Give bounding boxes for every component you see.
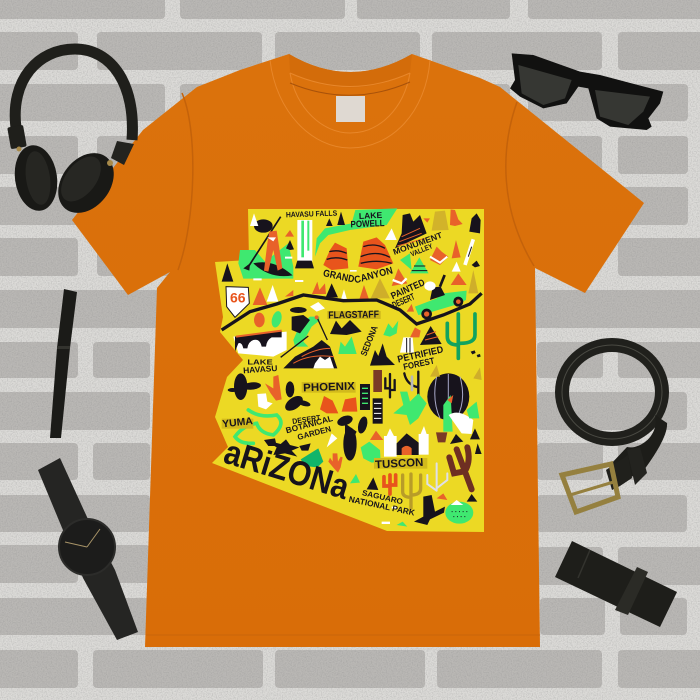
icon: sedona rocks [370, 343, 395, 366]
labels north: POWELL [350, 218, 385, 229]
icon: green shrubs [338, 321, 398, 354]
icon: leather belt [562, 345, 667, 512]
icon: white stripes [257, 393, 273, 409]
panel: southern arizona illustrations [220, 358, 482, 527]
labels south [220, 358, 427, 518]
icon: leather case [555, 541, 677, 627]
labels south: GARDEN [297, 424, 332, 442]
icon: pine trees [222, 212, 390, 305]
icon: flagstaff rocks [330, 320, 362, 335]
icon: route 66 sign: 66 [230, 290, 246, 306]
t-shirt [72, 54, 644, 647]
lake and river [238, 208, 397, 279]
labels north: MONUMENT [392, 230, 444, 257]
map outline [212, 209, 484, 532]
small rocks [367, 428, 482, 502]
icon: big dark prickly pear [336, 414, 369, 461]
icon: red and olive saguaros [384, 447, 472, 508]
icon: painted desert mounds [392, 253, 429, 286]
icon: monument valley butte [395, 213, 427, 248]
labels north: GRAND [322, 268, 355, 286]
icon: paddleboarder [243, 217, 293, 276]
labels north: HAVASU FALLS [286, 209, 337, 219]
icon: orange coral cactus [265, 375, 282, 401]
icon: canyon rocks [323, 237, 393, 270]
labels north: CANYON [353, 265, 394, 286]
icon: route 66 sign [226, 287, 249, 317]
labels north: SEDONA [359, 324, 380, 357]
icon: headphones [7, 49, 134, 224]
icon: agave plants [264, 438, 311, 457]
icon: lake havasu bridge [233, 331, 287, 357]
labels south: HAVASU [243, 363, 278, 375]
neck label [336, 96, 365, 122]
labels south: LAKE [247, 358, 273, 367]
labels north: PAINTED [389, 277, 427, 302]
accent plants [327, 365, 482, 527]
labels north: FOREST [402, 355, 436, 372]
icon: hiker on mountain [281, 302, 337, 368]
icon: orange cactus [328, 453, 343, 473]
labels south: DESERT [292, 413, 321, 426]
icon: pen [50, 289, 77, 438]
labels north: FLAGSTAFF [328, 309, 379, 321]
labels south: SAGUARO [361, 488, 404, 506]
icon: saguaro cactus green [447, 314, 475, 358]
icon: green prickly pear [393, 392, 427, 425]
labels south: YUMA [222, 416, 254, 430]
labels south: TUSCON [375, 457, 424, 471]
icon: dark prickly pear [283, 381, 311, 414]
labels south: aRiZONa [220, 433, 354, 507]
icon: petrified forest logs [400, 326, 442, 353]
labels south: BOTANICAL [285, 413, 334, 435]
icon: rattlesnake [235, 410, 281, 443]
icon: hot air balloon [427, 373, 479, 442]
icon: dark prickly bird cactus [228, 373, 261, 400]
icon: balloons [254, 310, 283, 329]
icon: green cactus [361, 442, 381, 463]
labels north: LAKE [359, 210, 383, 221]
icon: city towers [360, 370, 383, 424]
road [222, 293, 482, 330]
labels north: DESERT [391, 291, 416, 310]
icon: dark barrel cactus and green ball [414, 495, 473, 525]
icon: tucson mission [384, 426, 429, 457]
icon: orange rocks [320, 396, 357, 413]
decorative plants [285, 230, 467, 312]
icon: green striped cactus [301, 448, 323, 467]
icon: small cacti [385, 372, 418, 397]
icon: waterfall [295, 220, 314, 268]
labels north: PETRIFIED [397, 344, 444, 366]
arizona map [212, 208, 484, 532]
icon: convertible car [415, 275, 467, 319]
icon: wristwatch [38, 458, 138, 640]
labels north [286, 209, 444, 372]
panel: northern arizona illustrations [222, 208, 482, 372]
icon: sunglasses [510, 53, 663, 130]
top right decorations [423, 209, 481, 265]
labels north: VALLEY [409, 241, 434, 259]
labels south: NATIONAL PARK [348, 494, 416, 518]
labels south: PHOENIX [303, 381, 356, 394]
